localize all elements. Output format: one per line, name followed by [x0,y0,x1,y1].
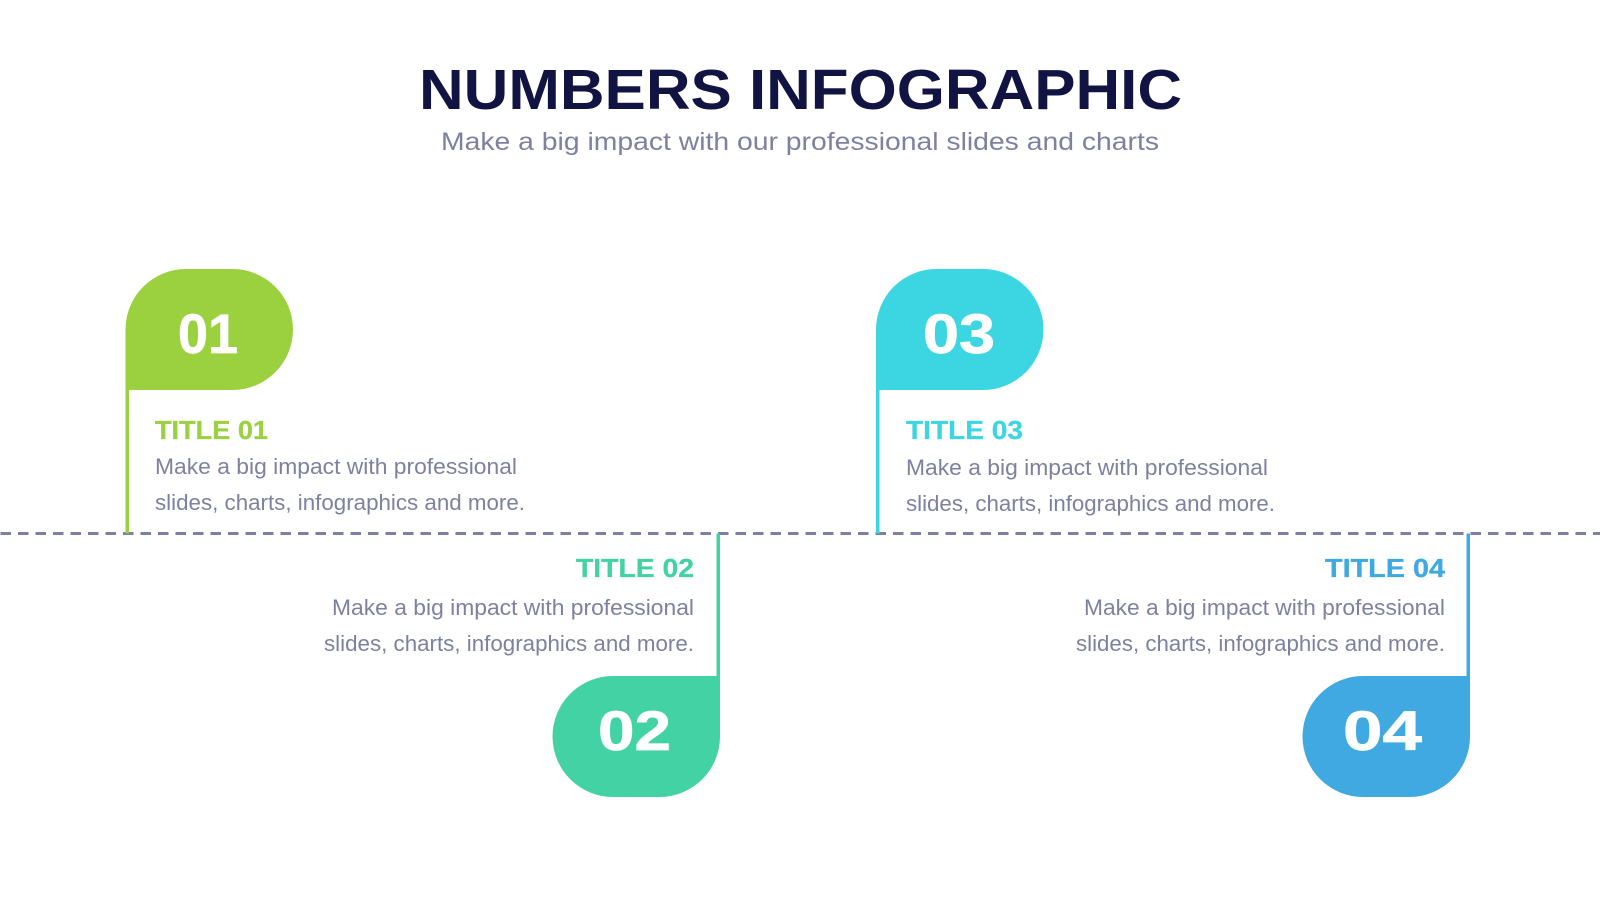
icon: cyan flag badge with stem [876,269,1043,534]
text: description 04: Make a big impact with professional [1084,595,1445,620]
text: description 03: slides, charts, infographics and more. [906,491,1275,516]
heading: title 01: TITLE 01 [155,415,268,445]
number 02: 02 [598,699,671,762]
dashed timeline [0,532,1600,535]
heading: title 04: TITLE 04 [1325,553,1446,583]
text: description 02: slides, charts, infographics and more. [324,631,694,656]
number 03: 03 [923,302,995,365]
icon: blue flag badge with stem [1302,534,1470,797]
number 04: 04 [1343,699,1422,762]
panel: step 04 [1076,534,1470,797]
subtitle: Make a big impact with our professional slides and charts [441,128,1159,156]
panel: step 01 [126,269,525,534]
text: description 01: Make a big impact with professional [155,454,517,479]
text: description 01: slides, charts, infographics and more. [155,490,525,515]
icon: green flag badge with stem [126,269,293,534]
panel: step 02 [324,534,720,797]
heading: title 03: TITLE 03 [906,415,1023,445]
heading: title 02: TITLE 02 [576,553,694,583]
text: description 04: slides, charts, infographics and more. [1076,631,1445,656]
text: description 03: Make a big impact with professional [906,455,1268,480]
title: NUMBERS INFOGRAPHIC [419,58,1182,122]
panel: step 03 [876,269,1275,534]
number 01: 01 [178,302,238,365]
icon: teal flag badge with stem [552,534,720,797]
text: description 02: Make a big impact with professional [332,595,694,620]
